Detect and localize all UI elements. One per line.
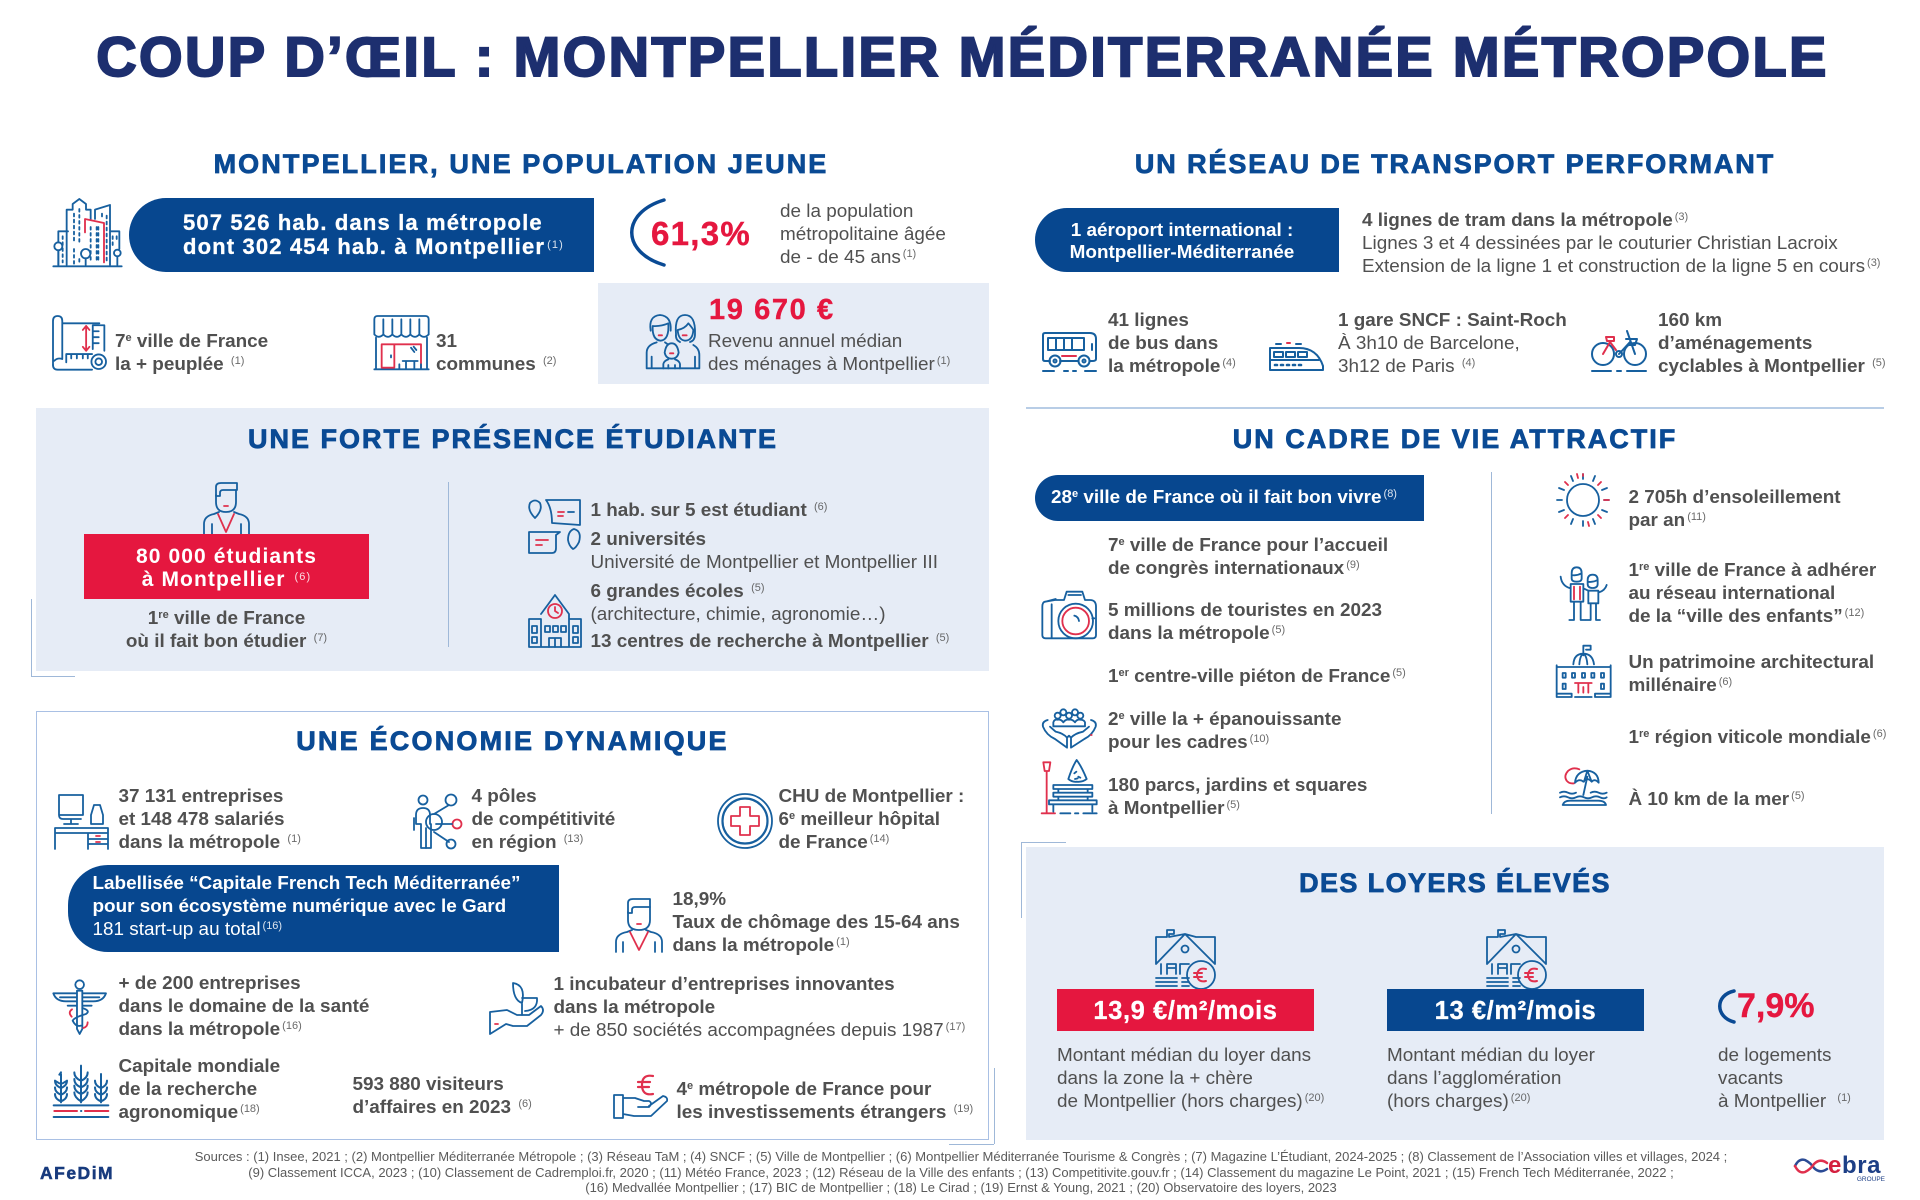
text: agronomie: de la recherche: [118, 1079, 257, 1100]
text: CHU: CHU de Montpellier :: [778, 786, 964, 807]
decorative corner: [1021, 842, 1066, 843]
text: mer: À 10 km de la mer(5): [1628, 788, 1805, 810]
text: chômage: Taux de chômage des 15-64 ans: [672, 912, 960, 933]
text: entreprises: et 148 478 salariés: [118, 809, 284, 830]
text: communes: [436, 330, 556, 374]
divider: [448, 482, 449, 647]
callout: population: [129, 198, 594, 272]
icon: arc: [1718, 989, 1736, 1024]
icon: beach: [1550, 765, 1620, 807]
text: bus: de bus dans: [1108, 332, 1218, 354]
text: gare: [1338, 308, 1567, 378]
text: agronomie: Capitale mondiale: [118, 1056, 280, 1077]
text: CHU: [778, 786, 964, 853]
panel: rents: [1026, 847, 1884, 1140]
callout: 80 000: [84, 534, 369, 599]
panel: revenue: [598, 283, 989, 384]
icon: desk: [54, 794, 109, 850]
text: cycling: 160 km: [1658, 310, 1722, 330]
icon: map: [52, 315, 107, 371]
text: tram: 4 lignes de tram dans la métropole(3): [1362, 210, 1688, 230]
text: pôles: 4 pôles: [472, 786, 537, 807]
text: vacants: à Montpellier (1): [1718, 1090, 1851, 1112]
stat: 7,9%: 7,9%: [1737, 987, 1814, 1025]
text: airport: 1 aéroport international :: [1071, 220, 1293, 240]
icon: bus: [1042, 332, 1097, 373]
text: zone chère: dans la zone la + chère: [1057, 1068, 1253, 1088]
icon: hospital: [717, 793, 773, 849]
text: touristes: dans la métropole(5): [1108, 622, 1285, 644]
text: bus: 41 lignes: [1108, 310, 1189, 330]
panel: population: [52, 149, 989, 384]
sources: Sources : (1) Insee, 2021 ; (2) Montpellier Méditerranée Métropole ; (3) Réseau TaM ; (4) SNCF ; (5) Ville de Montpellier ; (6) Montpellier Méditerranée Tourisme & Congrès ; (7) Magazine L’Étudiant, 2024-2025 ; (8) Classement de l’Association villes et villages, 2024 ;: [195, 1149, 1727, 1164]
text: viticole: 1re région viticole mondiale(6): [1628, 726, 1886, 748]
text: incubateur: [554, 974, 965, 1041]
text: zone chère: Montant médian du loyer dans: [1057, 1044, 1311, 1066]
callout: 28e ville: [1035, 475, 1424, 521]
heading: students: UNE FORTE PRÉSENCE ÉTUDIANTE: [248, 424, 778, 454]
divider: [1491, 472, 1492, 814]
text: patrimoine: Un patrimoine architectural: [1628, 652, 1874, 672]
text: écoles: (architecture, chimie, agronomie…): [590, 604, 886, 624]
icon: kids: [1550, 565, 1620, 625]
sources: [100, 1149, 1822, 1196]
icon: school: [528, 594, 582, 648]
text: ville des enfants: 1re ville de France à adhérer: [1628, 560, 1876, 580]
text: CHU: de France(14): [778, 832, 889, 853]
text: cycling: cyclables à Montpellier (5): [1658, 356, 1886, 376]
text: zone chère: de Montpellier (hors charges)(20): [1057, 1090, 1324, 1112]
stat: 61,3%: 61,3%: [651, 215, 751, 252]
icon: house 1: [1155, 928, 1216, 989]
text: CHU: 6e meilleur hôpital: [778, 809, 940, 830]
icon: heritage building: [1550, 642, 1620, 700]
text: tram: [1362, 208, 1880, 278]
logo: Ebra: ebra: [1828, 1152, 1881, 1179]
text: agronomie: [118, 1056, 280, 1123]
stat: revenue: 19 670 €: [709, 294, 835, 326]
text: ensoleillement: 2 705h d’ensoleillement: [1628, 486, 1841, 508]
text: young population: métropolitaine âgée: [780, 224, 946, 244]
text: investissements: [676, 1079, 973, 1123]
heading: population: MONTPELLIER, UNE POPULATION JEUNE: [214, 149, 828, 179]
text: 1 hab: 1 hab. sur 5 est étudiant (6): [590, 500, 827, 520]
panel: transport: [1035, 148, 1886, 376]
icon: nodes: [413, 794, 462, 850]
text: population numbers: [183, 210, 564, 259]
decorative corner: [31, 599, 32, 676]
text: entreprises: dans la métropole (1): [118, 832, 301, 853]
text: congrès: de congrès internationaux(9): [1108, 558, 1360, 578]
text: 80 000: 80 000 étudiants: [136, 544, 317, 568]
text: young population: de la population: [780, 200, 913, 222]
callout: French Tech: [68, 864, 558, 952]
icon: train: [1269, 342, 1324, 372]
text: agglomération: (hors charges)(20): [1387, 1090, 1530, 1112]
text: santé: dans le domaine de la santé: [118, 996, 369, 1017]
text: congrès: 7e ville de France pour l’accueil: [1108, 534, 1388, 556]
heading: rents: DES LOYERS ÉLEVÉS: [1299, 868, 1611, 898]
sources: (9) Classement ICCA, 2023 ; (10) Classement de Cadremploi.fr, 2020 ; (11) Météo France, 2023 ; (12) Réseau de la Ville des enfants ; (13) Competitivite.gouv.fr ; (14) Classement du magazine Le Point, 2021 ; (15) French Tech Méditerranée, 2022 ;: [248, 1164, 1674, 1180]
text: entreprises: [118, 786, 301, 853]
text: gare: 3h12 de Paris (4): [1338, 356, 1475, 376]
text: cadres: pour les cadres(10): [1108, 732, 1269, 752]
text: parcs: à Montpellier(5): [1108, 798, 1240, 818]
text: young population: [780, 200, 946, 268]
icon: camera: [1035, 585, 1105, 645]
text: agglomération: [1387, 1044, 1595, 1112]
icon: doctor: [615, 898, 663, 953]
text: revenue: Revenu annuel médian: [708, 330, 902, 352]
text: ville des enfants: de la “ville des enfants”(12): [1628, 606, 1864, 626]
title: COUP D’ŒIL : MONTPELLIER MÉDITERRANÉE MÉTROPOLE: [96, 25, 1829, 88]
text: young population: de - de 45 ans(1): [780, 246, 916, 268]
text: centres: 13 centres de recherche à Montpellier (5): [590, 630, 949, 652]
icon: sun: [1556, 473, 1610, 527]
icon: student: [203, 482, 250, 534]
decorative corner: [994, 1068, 995, 1144]
text: investissements: 4e métropole de France pour: [676, 1079, 931, 1100]
text: ensoleillement: [1628, 486, 1841, 532]
text: écoles: [590, 580, 886, 624]
text: ville des enfants: [1628, 558, 1876, 628]
text: 1re ville: [126, 608, 327, 652]
text: communes: 31: [436, 330, 457, 352]
text: touristes: [1108, 598, 1382, 644]
text: universités: Université de Montpellier et Montpellier III: [590, 552, 938, 572]
text: cycling: [1658, 308, 1886, 378]
heading: economy: UNE ÉCONOMIE DYNAMIQUE: [296, 726, 729, 756]
icon: wheat: [52, 1064, 110, 1118]
text: vacants: vacants: [1718, 1068, 1783, 1088]
text: santé: [118, 973, 369, 1040]
text: airport: Montpellier-Méditerranée: [1070, 242, 1294, 263]
logo: Afedim: AFeDiM: [40, 1163, 114, 1183]
logo: Ebra: GROUPE: [1857, 1176, 1885, 1183]
text: 80 000: à Montpellier (6): [142, 568, 311, 590]
text: revenue: [708, 330, 950, 374]
text: tram: Lignes 3 et 4 dessinées par le couturier Christian Lacroix: [1362, 232, 1838, 254]
text: vacants: de logements: [1718, 1044, 1831, 1066]
heading: transport: UN RÉSEAU DE TRANSPORT PERFORMANT: [1135, 149, 1775, 179]
text: touristes: 5 millions de touristes en 2023: [1108, 600, 1382, 620]
text: parcs: [1108, 774, 1367, 820]
text: 1re ville: 1re ville de France: [148, 608, 305, 629]
text: ville des enfants: au réseau international: [1628, 582, 1835, 604]
icon: chat: [528, 499, 581, 554]
text: gare: À 3h10 de Barcelone,: [1338, 332, 1520, 354]
icon: city: [52, 198, 123, 268]
text: chômage: [672, 889, 960, 956]
text: incubateur: 1 incubateur d’entreprises innovantes: [554, 974, 895, 995]
panel: economy: [36, 711, 989, 1140]
text: pôles: [472, 786, 615, 853]
panel: quality of life: [1026, 424, 1884, 816]
icon: shop: [373, 315, 430, 370]
text: écoles: 6 grandes écoles (5): [590, 580, 765, 602]
text: 80 000: [136, 544, 317, 590]
text: vacants: [1718, 1044, 1851, 1112]
text: French Tech: Labellisée “Capitale French Tech Méditerranée”: [92, 873, 520, 894]
text: chômage: dans la métropole(1): [672, 935, 850, 956]
text: population numbers: dont 302 454 hab. à Montpellier(1): [183, 234, 564, 259]
text: visiteurs: [352, 1074, 532, 1118]
icon: caduceus: [52, 979, 107, 1035]
text: 7e ville: 7e ville de France: [115, 330, 268, 352]
callout: airport: [1035, 208, 1339, 272]
text: tram: Extension de la ligne 1 et construction de la ligne 5 en cours(3): [1362, 256, 1880, 276]
text: santé: dans la métropole(16): [118, 1019, 302, 1040]
text: population numbers: 507 526 hab. dans la métropole: [183, 210, 543, 235]
icon: family: [646, 314, 700, 370]
text: investissements: les investissements étrangers (19): [676, 1102, 973, 1123]
text: 13: 13 €/m²/mois: [1435, 997, 1596, 1025]
text: agglomération: Montant médian du loyer: [1387, 1044, 1595, 1066]
text: cycling: d’aménagements: [1658, 332, 1812, 354]
text: universités: [590, 528, 938, 572]
text: incubateur: + de 850 sociétés accompagnées depuis 1987(17): [554, 1020, 965, 1041]
icon: house 2: [1486, 928, 1547, 989]
heading: quality of life: UN CADRE DE VIE ATTRACTIF: [1233, 424, 1677, 454]
icon: plant hand: [489, 982, 544, 1035]
text: congrès: [1108, 534, 1388, 580]
icon: arc: [630, 198, 666, 267]
text: French Tech: 181 start-up au total(16): [92, 919, 282, 940]
text: entreprises: 37 131 entreprises: [118, 786, 283, 807]
icon: euro hand: [613, 1074, 668, 1119]
text: santé: + de 200 entreprises: [118, 973, 301, 994]
sources: (16) Medvallée Montpellier ; (17) BIC de Montpellier ; (18) Le Cirad ; (19) Ernst & Young, 2021 ; (20) Observatoire des loyers, 2023: [585, 1180, 1337, 1195]
panel: students: [36, 408, 989, 671]
text: French Tech: [92, 873, 520, 940]
callout: 13,9: [1057, 989, 1314, 1031]
text: agronomie: agronomique(18): [118, 1102, 260, 1123]
text: 7e ville: la + peuplée (1): [115, 354, 244, 374]
text: pôles: en région (13): [472, 832, 583, 853]
text: communes: communes (2): [436, 354, 556, 374]
text: 13,9: 13,9 €/m²/mois: [1093, 997, 1278, 1025]
text: revenue: des ménages à Montpellier(1): [708, 354, 950, 374]
text: French Tech: pour son écosystème numérique avec le Gard: [92, 896, 506, 917]
icon: hands: [1035, 708, 1105, 750]
text: zone chère: [1057, 1044, 1324, 1112]
text: universités: 2 universités: [590, 528, 706, 550]
text: cadres: 2e ville la + épanouissante: [1108, 708, 1341, 730]
text: ensoleillement: par an(11): [1628, 510, 1706, 530]
text: incubateur: dans la métropole: [554, 997, 715, 1018]
icon: bike: [1591, 330, 1647, 372]
text: bus: [1108, 308, 1236, 378]
text: visiteurs: d’affaires en 2023 (6): [352, 1097, 532, 1118]
text: visiteurs: 593 880 visiteurs: [352, 1074, 504, 1095]
text: chômage: 18,9%: [672, 889, 726, 910]
text: parcs: 180 parcs, jardins et squares: [1108, 774, 1367, 796]
text: patrimoine: millénaire(6): [1628, 674, 1732, 696]
text: 1re ville: où il fait bon étudier (7): [126, 631, 327, 652]
icon: park: [1035, 758, 1105, 815]
text: airport: [1070, 220, 1294, 263]
text: piéton: 1er centre-ville piéton de France(5): [1108, 666, 1406, 686]
text: bus: la métropole(4): [1108, 356, 1236, 376]
text: agglomération: dans l’agglomération: [1387, 1068, 1561, 1088]
text: gare: 1 gare SNCF : Saint-Roch: [1338, 310, 1567, 330]
text: pôles: de compétitivité: [472, 809, 615, 830]
text: patrimoine: [1628, 650, 1874, 696]
logo: Ebra: [1793, 1155, 1885, 1181]
callout: 13: [1387, 989, 1644, 1031]
text: cadres: [1108, 708, 1341, 754]
text: 28e ville: 28e ville de France où il fait bon vivre(8): [1051, 486, 1397, 508]
divider: [1026, 407, 1884, 409]
text: 7e ville: [115, 330, 268, 374]
